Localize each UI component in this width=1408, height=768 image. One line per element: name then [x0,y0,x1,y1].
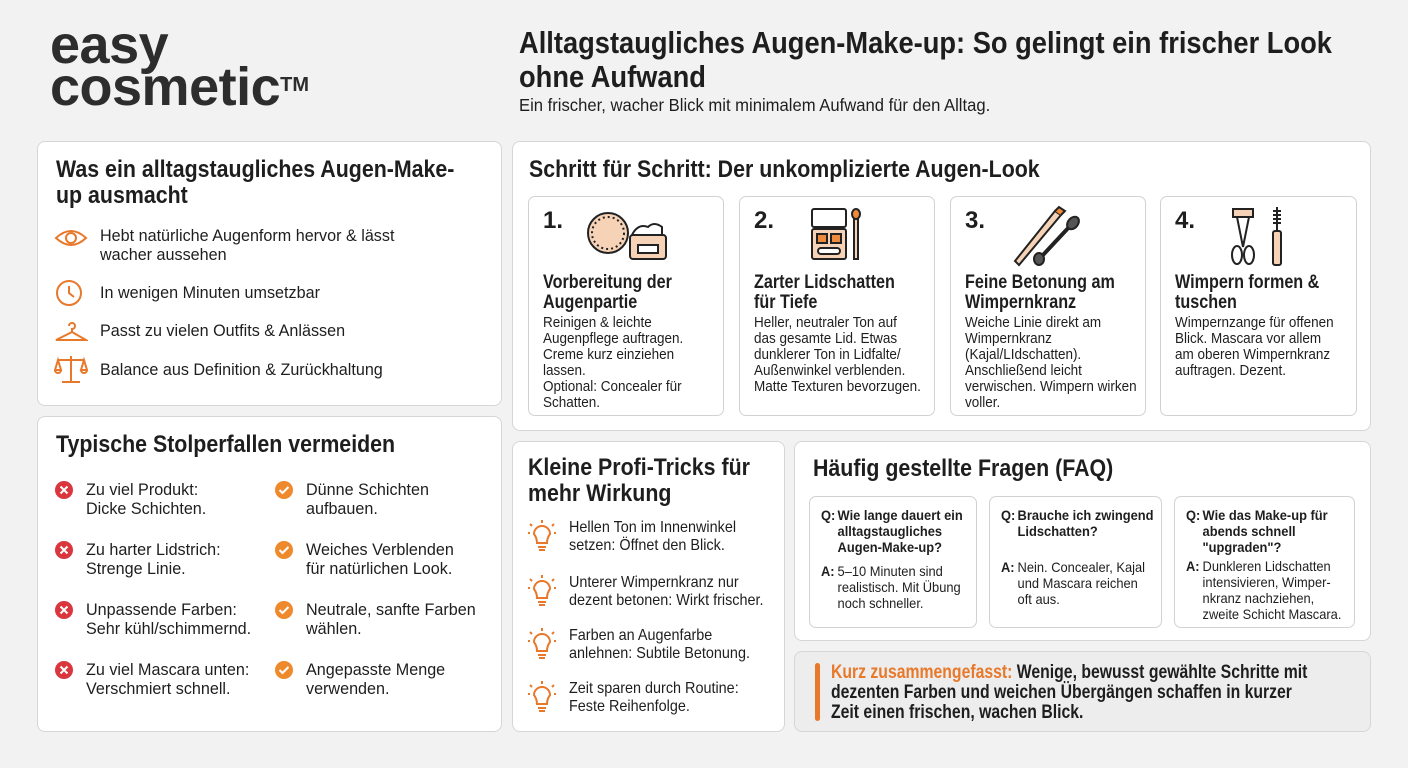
right list: wählen. [306,619,362,638]
faq 2: Lidschatten? [1018,523,1098,539]
faq 3: nkranz nachziehen, [1203,590,1314,606]
step 3: Weiche Linie direkt am [965,315,1101,331]
step 1: Reinigen & leichte [543,315,652,331]
heading: Häufig gestellte Fragen (FAQ) [813,455,1113,482]
title [519,25,1332,94]
tricks list [528,519,763,715]
faq 2: Q: [1001,507,1015,523]
faq 1: alltagstaugliches [838,523,942,539]
step 4: auftragen. Dezent. [1175,363,1286,379]
item: clock [56,280,320,306]
faq 3: "upgraden"? [1203,539,1281,555]
step 1: Vorbereitung der [543,272,672,293]
summary callout [794,651,1371,732]
step 4: tuschen [1175,292,1237,313]
panel: steps [512,141,1371,431]
faq 1: realistisch. Mit Übung [838,579,961,595]
step 2: Matte Texturen bevorzugen. [754,379,921,395]
panel: FAQ [794,441,1371,641]
step 4: Blick. Mascara vor allem [1175,331,1321,347]
tricks list: Feste Reihenfolge. [569,698,690,715]
right list [275,480,476,698]
faq 3: intensivieren, Wimper- [1203,574,1331,590]
logo: easy [50,15,168,75]
icon: palette [811,208,861,260]
faq 3: Wie das Make-up für [1203,507,1328,523]
right list: verwenden. [306,679,389,698]
faq 1: noch schneller. [838,595,923,611]
step 2: für Tiefe [754,292,817,313]
faq 2: und Mascara reichen [1018,575,1138,591]
step 3: voller. [965,395,1000,411]
heading: up ausmacht [56,182,188,209]
faq 3: Q: [1186,507,1200,523]
step 1 [528,196,724,416]
step 1: Schatten. [543,395,600,411]
title: Alltagstaugliches Augen-Make-up: So gelingt ein frischer Look [519,25,1332,60]
step 2: Zarter Lidschatten [754,272,895,293]
step 3: Wimpernkranz [965,331,1052,347]
item: eye: Hebt natürliche Augenform hervor & lässt [100,226,394,245]
faq 2: A: [1001,559,1015,575]
right list: Neutrale, sanfte Farben [306,600,476,619]
heading: mehr Wirkung [528,480,671,507]
panel: tricks [512,441,785,732]
step 2 [739,196,935,416]
step 3: 3. [965,207,985,234]
right list: Dünne Schichten [306,480,429,499]
faq 1: A: [821,563,835,579]
heading [56,156,454,209]
step 4: 4. [1175,207,1195,234]
faq 3: Dunkleren Lidschatten [1203,558,1331,574]
tricks list: Farben an Augenfarbe [569,627,712,644]
wrong list: Zu harter Lidstrich: [86,540,221,559]
wrong list: Zu viel Mascara unten: [86,660,249,679]
title: ohne Aufwand [519,59,706,94]
item: hanger: Passt zu vielen Outfits & Anlässen [100,321,345,340]
heading: Was ein alltagstaugliches Augen-Make- [56,156,454,183]
step 2: das gesamte Lid. Etwas [754,331,897,347]
panel: pitfalls [37,416,502,732]
tricks list: anlehnen: Subtile Betonung. [569,645,750,662]
step 1: Augenpartie [543,292,637,313]
logo [50,15,309,117]
step 3: Anschließend leicht [965,363,1082,379]
step 2: Heller, neutraler Ton auf [754,315,897,331]
faq 3: A: [1186,558,1200,574]
step 1: lassen. [543,363,586,379]
step 3 [950,196,1146,416]
step 2: dunklerer Ton in Lidfalte/ [754,347,901,363]
step 3: verwischen. Wimpern wirken [965,379,1137,395]
tricks list: Unterer Wimpernkranz nur [569,574,739,591]
right list: Weiches Verblenden [306,540,454,559]
right list: Angepasste Menge [306,660,445,679]
item: eye: wacher aussehen [100,245,227,264]
step 1: 1. [543,207,563,234]
tricks list: setzen: Öffnet den Blick. [569,537,725,554]
faq 2: oft aus. [1018,591,1060,607]
item: scale [54,356,383,383]
tricks list: Zeit sparen durch Routine: [569,680,739,697]
item: scale: Balance aus Definition & Zurückhaltung [100,360,383,379]
wrong list: Dicke Schichten. [86,499,206,518]
heading: Typische Stolperfallen vermeiden [56,431,395,458]
icon: pencil & brush [1014,206,1080,266]
faq 3: zweite Schicht Mascara. [1203,606,1341,622]
right list: für natürlichen Look. [306,559,452,578]
faq 1: Wie lange dauert ein [838,507,963,523]
wrong list: Zu viel Produkt: [86,480,198,499]
faq 2 [989,496,1162,628]
tricks list: Hellen Ton im Innenwinkel [569,519,736,536]
faq 2: Nein. Concealer, Kajal [1018,559,1145,575]
item: eye [54,226,394,264]
step 1: Optional: Concealer für [543,379,682,395]
wrong list: Sehr kühl/schimmernd. [86,619,251,638]
icon: pad & cream [587,212,667,260]
faq 3 [1174,496,1355,628]
faq 1: Augen-Make-up? [838,539,942,555]
logo: cosmeticTM [50,57,309,117]
faq 3: abends schnell [1203,523,1296,539]
wrong list [55,480,251,698]
subtitle: Ein frischer, wacher Blick mit minimalem Aufwand für den Alltag. [519,95,990,115]
step 3: Feine Betonung am [965,272,1115,293]
step 4: am oberen Wimpernkranz [1175,347,1330,363]
wrong list: Unpassende Farben: [86,600,237,619]
faq 1: 5–10 Minuten sind [838,563,943,579]
item: clock: In wenigen Minuten umsetzbar [100,283,320,302]
summary callout: Kurz zusammengefasst: Wenige, bewusst gewählte Schritte mit [831,662,1307,683]
tricks list: dezent betonen: Wirkt frischer. [569,592,763,609]
step 4: Wimpern formen & [1175,272,1319,293]
icon: curler & mascara [1231,207,1282,266]
step 4: Wimpernzange für offenen [1175,315,1334,331]
step 3: Wimpernkranz [965,292,1076,313]
right list: aufbauen. [306,499,378,518]
step 3: (Kajal/LIdschatten). [965,347,1081,363]
heading: Schritt für Schritt: Der unkomplizierte Augen-Look [529,156,1040,183]
heading [528,454,750,507]
step 1: Creme kurz einziehen [543,347,674,363]
wrong list: Strenge Linie. [86,559,186,578]
faq 1: Q: [821,507,835,523]
step 2: Außenwinkel verblenden. [754,363,905,379]
step 4 [1160,196,1357,416]
summary callout: dezenten Farben und weichen Übergängen schaffen in kurzer [831,682,1292,703]
heading: Kleine Profi-Tricks für [528,454,750,481]
wrong list: Verschmiert schnell. [86,679,231,698]
panel: what makes it [37,141,502,406]
step 1: Augenpflege auftragen. [543,331,683,347]
step 2: 2. [754,207,774,234]
faq 1 [809,496,977,628]
faq 2: Brauche ich zwingend [1018,507,1154,523]
summary callout: Zeit einen frischen, wachen Blick. [831,702,1083,723]
